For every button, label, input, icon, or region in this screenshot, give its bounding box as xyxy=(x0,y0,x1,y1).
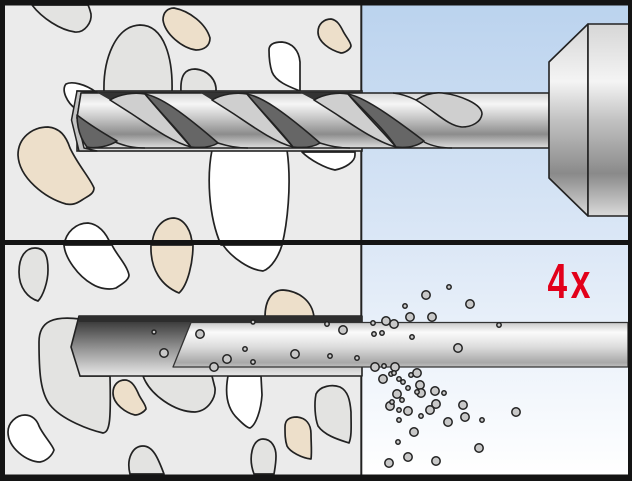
blow-out tube xyxy=(173,322,628,367)
concrete pebbles: upper panel xyxy=(18,5,355,245)
dark flute wedges at the top of the bit xyxy=(97,92,348,100)
repetition label: 4x: 4x xyxy=(548,254,591,309)
structural lines xyxy=(360,5,362,475)
drill bit body and shank xyxy=(77,93,549,148)
concrete pebbles: lower panel xyxy=(8,245,351,474)
spiral flutes xyxy=(77,93,482,148)
hole top shade xyxy=(79,316,362,322)
panel: drilling the hole xyxy=(72,24,630,216)
dust particles xyxy=(152,285,520,467)
twist outlines xyxy=(115,93,452,148)
icon: drill tip carbide xyxy=(72,91,97,151)
cleaned drill hole xyxy=(71,316,362,376)
drill hole xyxy=(77,91,362,151)
icon: drill chuck xyxy=(549,24,630,216)
panel: blowing out the hole xyxy=(71,254,628,467)
